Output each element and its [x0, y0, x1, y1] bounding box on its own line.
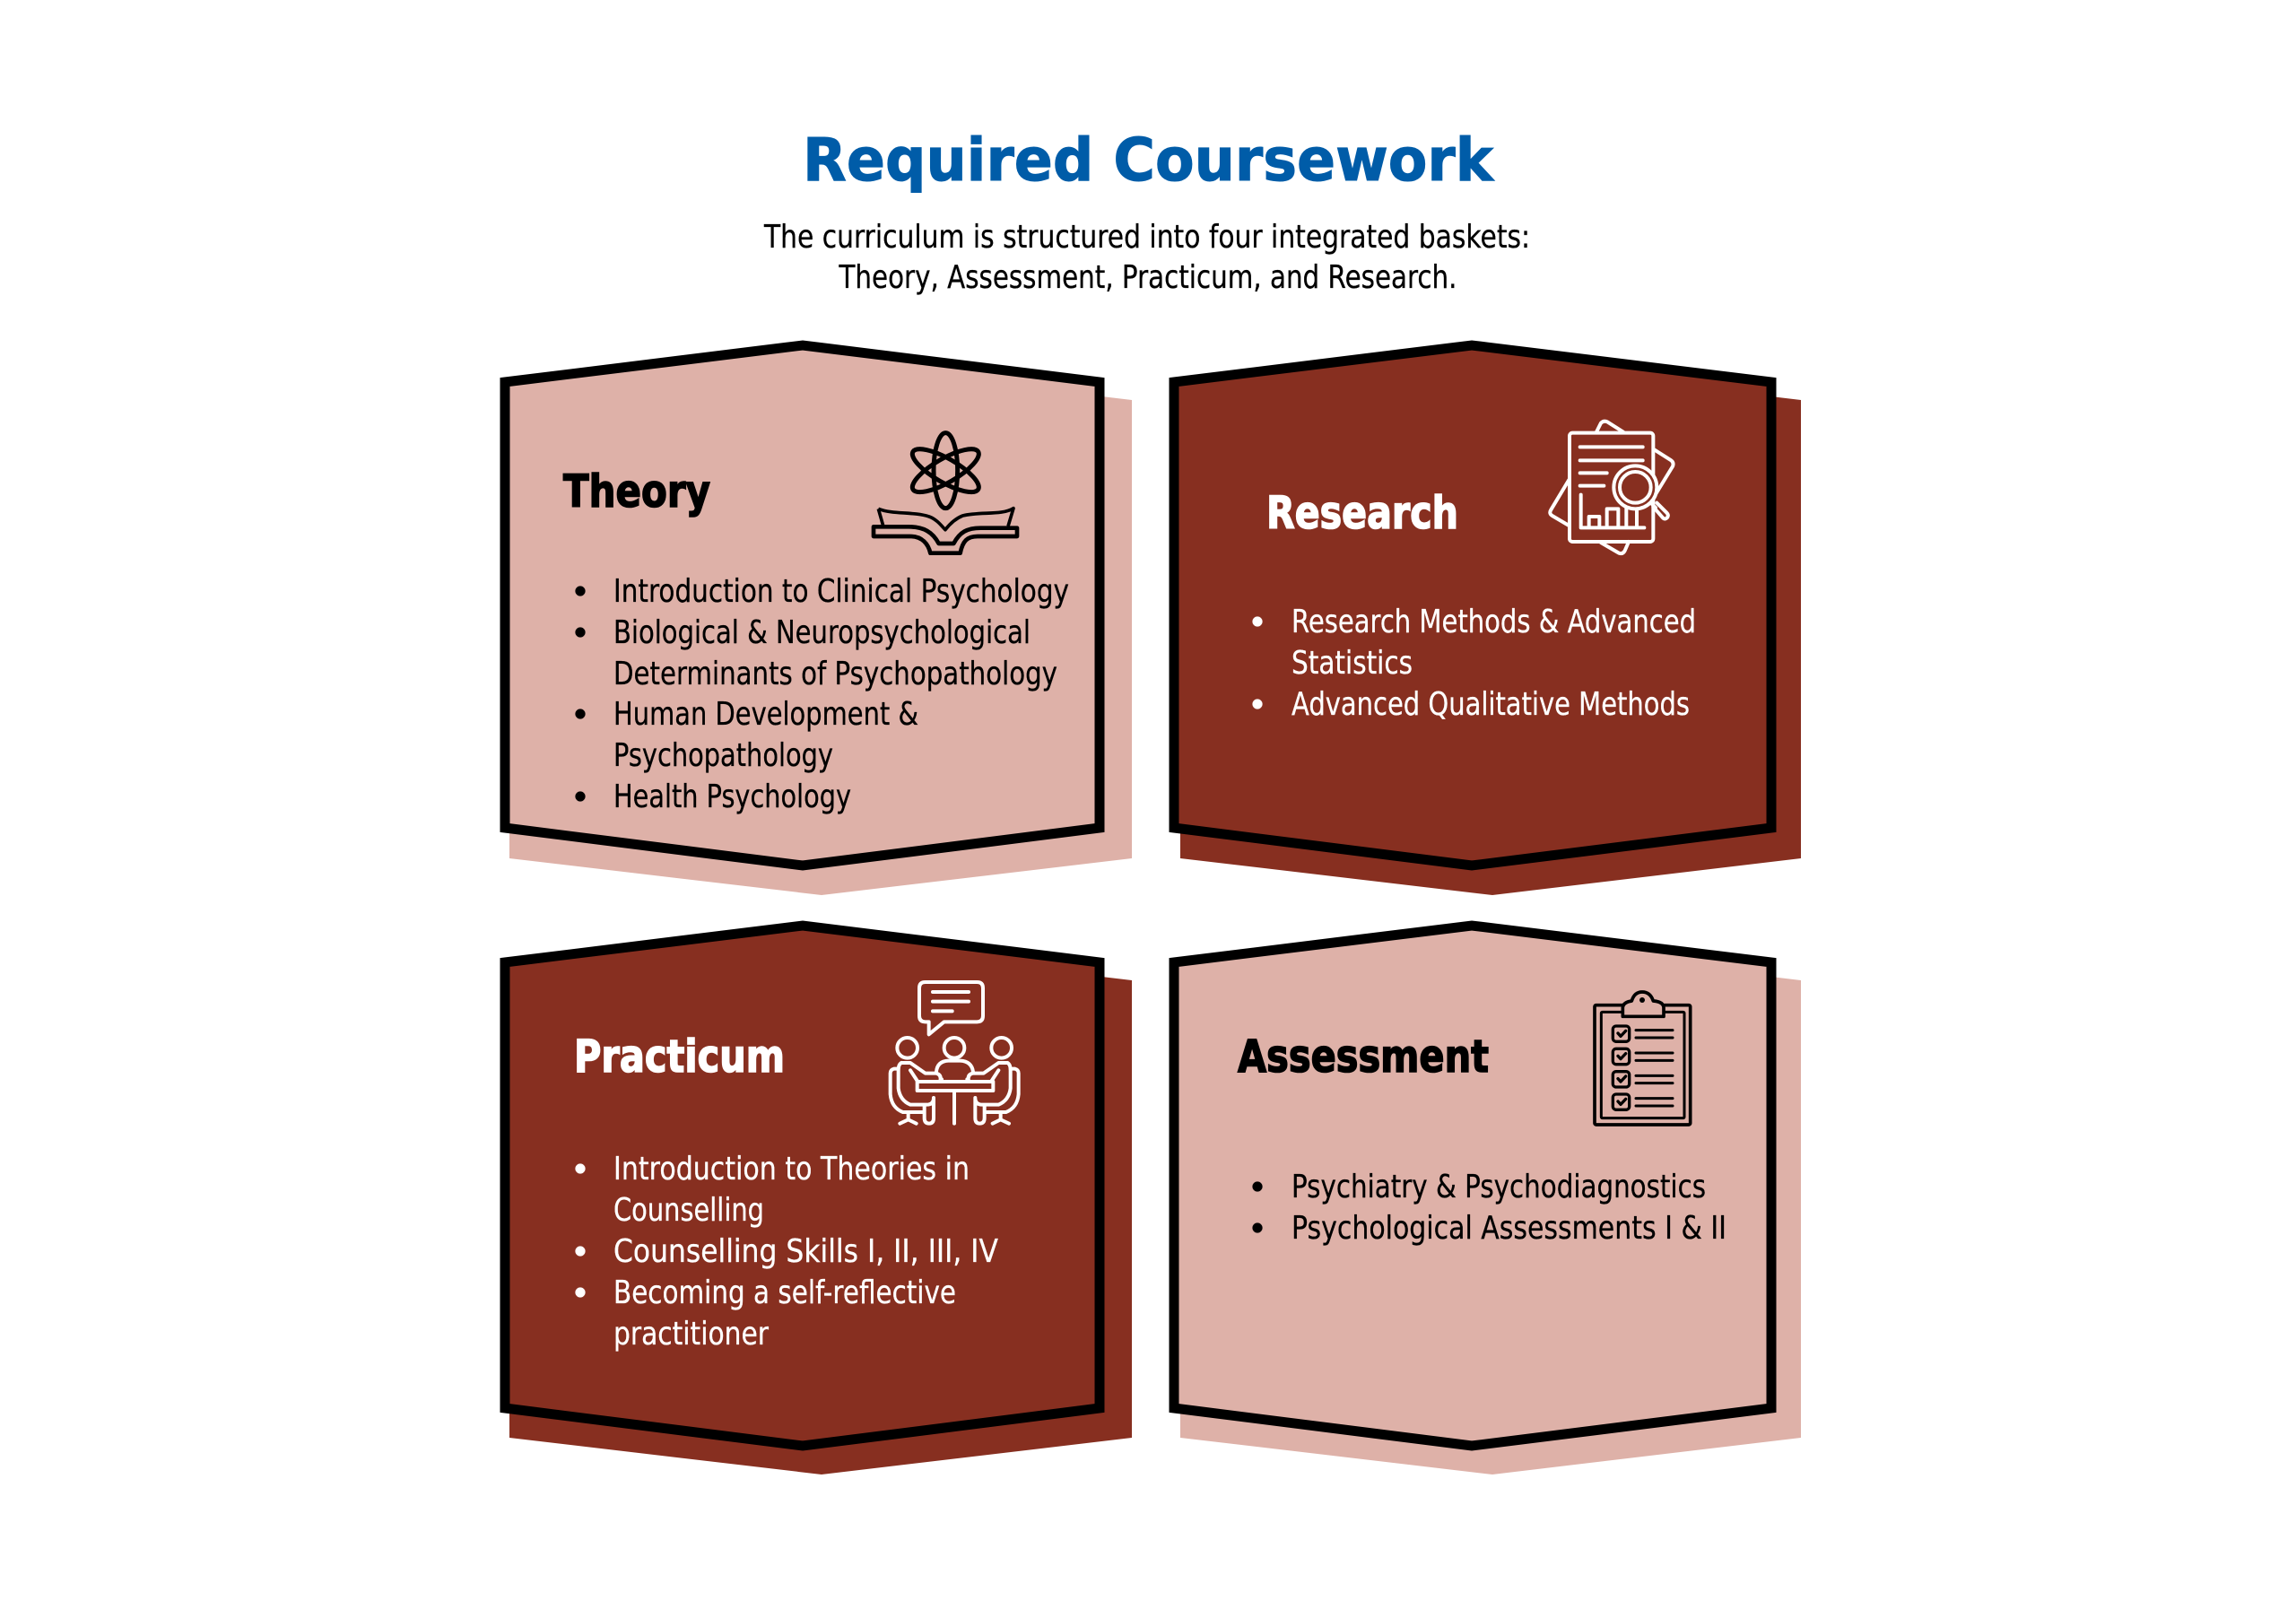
practicum course list: Becoming a self-reflective	[613, 1274, 956, 1311]
icon: clipboard checklist	[1595, 992, 1691, 1125]
research hexagon	[1174, 345, 1771, 866]
panel: practicum	[505, 926, 1132, 1474]
theory course list	[576, 573, 1069, 815]
assessment shadow	[1180, 944, 1801, 1474]
theory hexagon	[505, 345, 1100, 866]
research course list: Research Methods & Advanced	[1292, 604, 1696, 640]
research course list: Advanced Qualitative Methods	[1292, 686, 1690, 723]
icon: meeting around a table	[891, 982, 1019, 1124]
research heading: Research	[1266, 487, 1458, 539]
panel: assessment	[1174, 926, 1801, 1474]
assessment course list: Psychological Assessments I & II	[1292, 1210, 1726, 1247]
assessment course list	[1252, 1169, 1726, 1247]
theory course list: Introduction to Clinical Psychology	[613, 573, 1069, 610]
practicum course list: Introduction to Theories in	[613, 1151, 970, 1187]
subtitle: Theory, Assessment, Practicum, and Research.	[839, 259, 1457, 296]
practicum course list	[576, 1151, 998, 1353]
research shadow	[1180, 363, 1801, 895]
theory course list: Biological & Neuropsychological	[613, 614, 1031, 651]
practicum shadow	[509, 944, 1132, 1474]
icon: report with magnifier	[1550, 422, 1674, 553]
subtitle	[763, 219, 1530, 296]
subtitle: The curriculum is structured into four integrated baskets:	[763, 219, 1530, 256]
theory heading: Theory	[563, 465, 710, 518]
icon: atom and open book	[874, 433, 1017, 553]
theory course list: Human Development &	[613, 696, 918, 733]
theory course list: Health Psychology	[613, 779, 851, 815]
practicum heading: Practicum	[574, 1031, 785, 1083]
research course list: Statistics	[1292, 645, 1413, 682]
panel: theory	[505, 345, 1132, 895]
title: Required Coursework	[803, 126, 1495, 195]
assessment heading: Assessment	[1238, 1031, 1489, 1083]
panel: research	[1174, 345, 1801, 895]
practicum course list: Counselling Skills I, II, III, IV	[613, 1233, 998, 1270]
practicum course list: Counselling	[613, 1192, 764, 1229]
practicum course list: practitioner	[613, 1316, 769, 1353]
assessment course list: Psychiatry & Psychodiagnostics	[1292, 1169, 1706, 1205]
research course list	[1252, 604, 1696, 723]
theory course list: Determinants of Psychopathology	[613, 656, 1057, 692]
theory shadow	[509, 363, 1132, 895]
practicum hexagon	[505, 926, 1100, 1446]
theory course list: Psychopathology	[613, 737, 833, 774]
assessment hexagon	[1174, 926, 1771, 1446]
